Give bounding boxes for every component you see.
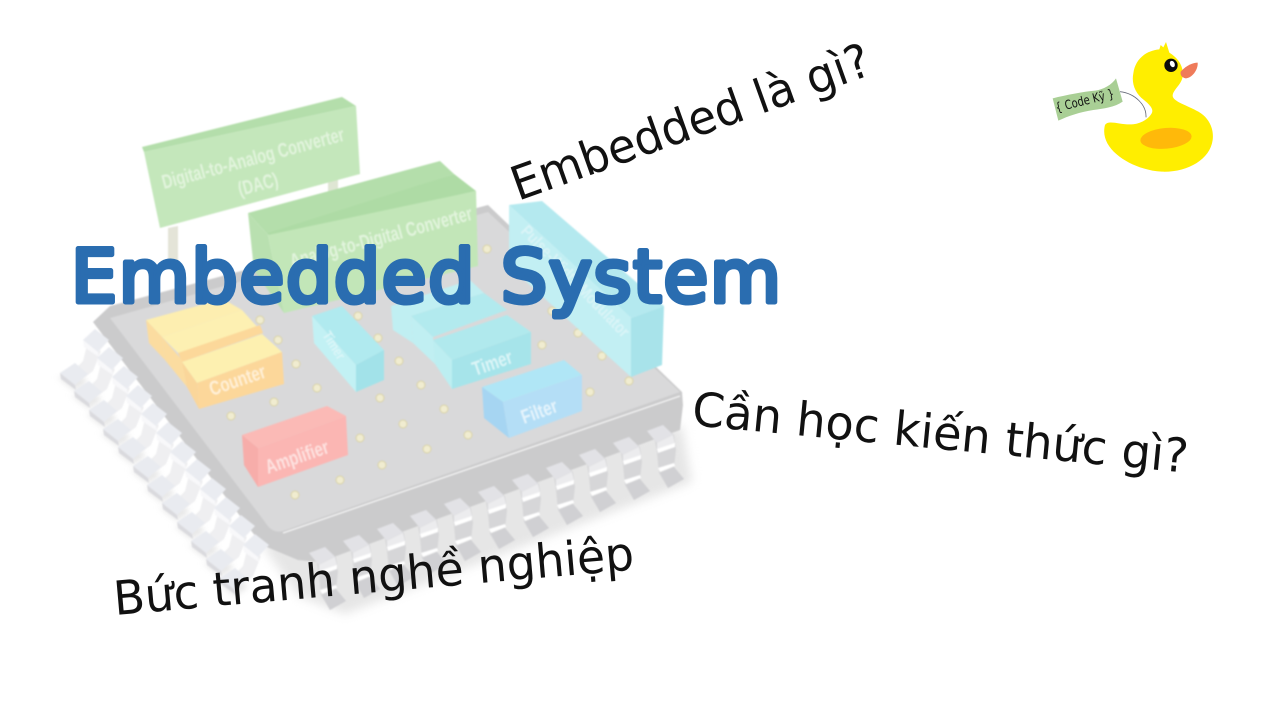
block: pulse-width modulator [509,201,664,377]
flag string [1120,92,1146,117]
chip solder dots [227,245,633,499]
block: small timer: Timer [319,329,348,362]
block: amplifier: Amplifier [262,436,332,478]
blocks: counters [146,299,284,409]
block: analog-to-digital converter: Analog-to-Digital Converter [287,202,475,272]
block: pulse-width modulator: Pulse-Width Modulator [517,222,633,341]
duck eye [1164,59,1178,72]
blocks: timers: Timer [469,346,515,380]
label: Cần học kiến thức gì?: Cần học kiến thức gì? [690,382,1191,485]
chip soft shadow [262,425,692,614]
flag text: { Code Kỹ } [1054,86,1116,115]
duck beak [1181,63,1198,78]
blocks: counters: Counter [206,360,269,400]
flag [1053,78,1123,121]
block: digital-to-analog converter [142,97,360,262]
background: faded microcontroller chip illustration [57,97,692,614]
chip bottom pins [309,425,684,610]
block: digital-to-analog converter: (DAC) [235,168,281,200]
block: analog-to-digital converter [248,161,478,313]
blocks: timers [391,280,531,389]
chip left pins [57,329,269,596]
chip body [93,205,683,562]
block: small timer [312,306,384,392]
duck body [1104,42,1213,172]
block: digital-to-analog converter: Digital-to-Analog Converter [159,123,347,193]
block: filter: Filter [518,394,561,428]
label: Bức tranh nghề nghiệp: Bức tranh nghề nghiệp [111,527,636,627]
logo: Code Kỹ duck [1053,42,1213,172]
duck wing [1140,126,1192,151]
block: amplifier [242,406,348,487]
title: Embedded System [71,235,781,320]
label: Embedded là gì?: Embedded là gì? [504,33,878,212]
block: filter [482,360,582,438]
